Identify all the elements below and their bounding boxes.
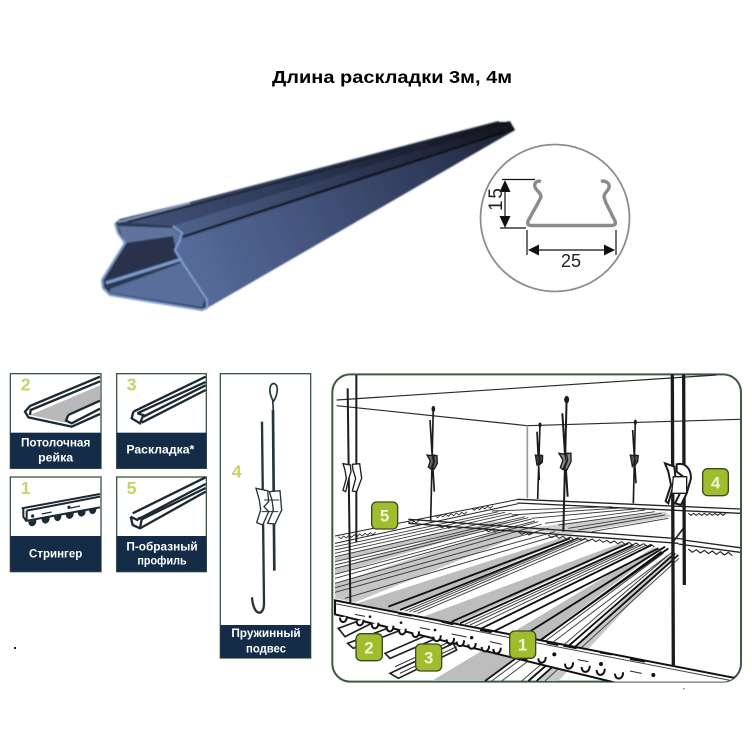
room lines bbox=[337, 375, 740, 498]
parts legend cards bbox=[10, 374, 311, 658]
dimension 15 bbox=[486, 180, 535, 228]
dimension 25 bbox=[527, 230, 616, 271]
card 4: spring hanger: 4 bbox=[232, 461, 242, 481]
card 2: ceiling slat: Потолочная bbox=[21, 436, 90, 450]
installation diagram bbox=[332, 374, 741, 685]
card 2: ceiling slat: рейка bbox=[38, 451, 73, 465]
ceiling slats bbox=[335, 507, 679, 681]
dimension 15: 15 bbox=[486, 188, 507, 211]
badge 2 bbox=[356, 634, 382, 661]
card 4: spring hanger: подвес bbox=[246, 641, 286, 655]
profile outline bbox=[528, 181, 615, 226]
badge 1 bbox=[510, 631, 536, 658]
title: Длина раскладки 3м, 4м bbox=[272, 67, 512, 87]
hanger clips bbox=[343, 453, 691, 505]
badge 2: 2 bbox=[364, 638, 374, 657]
card 4: spring hanger: Пружинный bbox=[231, 626, 301, 640]
cross-section dimension circle bbox=[480, 144, 630, 292]
badge 1: 1 bbox=[518, 636, 527, 655]
badge 5: 5 bbox=[380, 507, 389, 526]
card 3: spacer strip: Раскладка* bbox=[126, 443, 195, 457]
badge 4 bbox=[703, 469, 728, 496]
card 5: U-shaped profile: 5 bbox=[127, 478, 137, 498]
card 5: U-shaped profile: профиль bbox=[137, 554, 187, 568]
badge 4: 4 bbox=[711, 473, 721, 492]
small speck below diagram bbox=[683, 688, 684, 690]
card 2: ceiling slat bbox=[10, 374, 101, 468]
product photo: ceiling strip profile bbox=[102, 121, 515, 310]
back stringers bbox=[335, 499, 740, 556]
card 1: stringer bbox=[10, 477, 101, 572]
card 5: U-shaped profile: П-образный bbox=[126, 540, 198, 554]
badge 5 bbox=[372, 502, 398, 529]
hanger drawing bbox=[252, 384, 282, 613]
hanger rods bbox=[348, 374, 684, 667]
card 1: stringer: 1 bbox=[21, 478, 31, 498]
spacer rails below stringer bbox=[338, 617, 457, 678]
badge 3: 3 bbox=[424, 649, 433, 668]
card 1: stringer: Стрингер bbox=[29, 547, 83, 561]
small dot mark bbox=[14, 647, 16, 649]
card 4: spring hanger bbox=[220, 374, 311, 658]
card 3: spacer strip bbox=[117, 374, 206, 468]
card 2: ceiling slat: 2 bbox=[21, 375, 31, 395]
front stringer bbox=[335, 600, 737, 685]
dimension 25: 25 bbox=[561, 251, 581, 271]
card 5: U-shaped profile bbox=[117, 477, 206, 572]
badge 3 bbox=[416, 644, 442, 671]
card 3: spacer strip: 3 bbox=[127, 375, 137, 395]
